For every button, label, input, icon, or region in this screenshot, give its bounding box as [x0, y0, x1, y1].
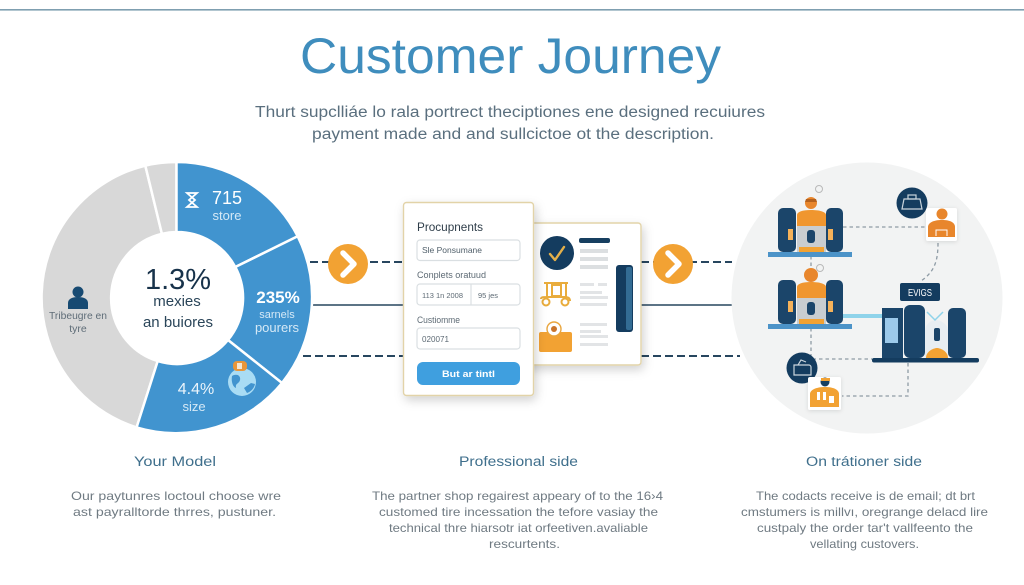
body text: right: The codacts receive is de email; dt brt	[756, 489, 976, 503]
centre label: 1.3%	[145, 264, 211, 296]
label: grey segment: tyre	[69, 323, 87, 335]
panel: technician network	[732, 162, 1002, 434]
label: EVIGS: EVIGS	[908, 287, 932, 299]
donut segment: grey small	[145, 162, 176, 234]
field: date: 113 1n 2008	[422, 291, 463, 300]
label: size: 4.4%	[178, 381, 214, 398]
field: date	[417, 284, 520, 305]
subtitle: payment made and and sullcictoe ot the description.	[312, 126, 714, 143]
field: name	[417, 240, 520, 260]
person: bottom	[808, 377, 841, 410]
panel: back card	[500, 223, 641, 365]
label: grey segment: Tribeugre en	[49, 310, 107, 322]
arrow: right chevron	[653, 244, 693, 284]
column: professional side	[372, 454, 663, 551]
field: number: 020071	[422, 335, 450, 344]
machine: top	[768, 186, 852, 257]
body text: centre: technical thre hiarsotr iat orfeetiven.avaliable	[389, 521, 648, 535]
dashed links	[811, 227, 938, 396]
body text: right: vellating custovers.	[810, 537, 919, 551]
icon: wallet	[539, 322, 572, 352]
label: size: size	[182, 399, 206, 414]
body text: left: Our paytunres loctoul choose wre	[71, 489, 281, 503]
label: pourers: pourers	[255, 320, 300, 335]
machine: middle	[768, 264, 852, 329]
label: pourers	[255, 288, 300, 335]
centre label: mexies	[153, 293, 201, 310]
subtitle: Thurt supclliáe lo rala portrect theciptiones ene designed recuiures	[255, 104, 765, 121]
text lines: bottom	[580, 323, 608, 346]
arrow: left chevron	[328, 244, 368, 284]
cyan connector	[843, 314, 883, 318]
donut segment: grey large	[42, 166, 162, 427]
body text: centre: customed tire incessation the tefore vasiay the	[379, 505, 658, 519]
centre label	[143, 264, 213, 331]
donut segment: store	[176, 162, 298, 267]
icon: person	[68, 286, 88, 309]
body text: left: ast payralltorde thrres, pustuner.	[73, 505, 276, 519]
label: store: 715	[212, 188, 242, 208]
icon: store	[187, 193, 197, 207]
body text: centre: The partner shop regairest appeary of to the 16›4	[372, 489, 663, 503]
body text: centre: rescurtents.	[489, 537, 560, 551]
tall bar	[616, 265, 633, 332]
column: your model	[71, 454, 281, 519]
field: number	[417, 328, 520, 349]
button: But ar tintl	[442, 369, 495, 379]
body text: right: cmstumers is millvı, oregrange delacd lire	[741, 505, 988, 519]
form heading: Procupnents	[417, 222, 483, 234]
label: store: store	[213, 208, 241, 223]
column: your model: Your Model	[134, 454, 216, 469]
donut segment: pourers	[228, 236, 312, 383]
icon: globe	[228, 361, 256, 396]
label: grey segment	[49, 310, 107, 335]
icon: vehicle	[541, 283, 570, 306]
column: on trationer side: On trátioner side	[806, 454, 922, 469]
label: store	[212, 188, 242, 223]
field: name: Sle Ponsumane	[422, 245, 482, 255]
centre label: an buiores	[143, 314, 213, 331]
label: EVIGS	[900, 283, 940, 301]
donut segment: size	[137, 340, 282, 433]
body text: right: custpaly the order tar't vallfeento the	[757, 521, 973, 535]
label: size	[178, 381, 214, 414]
label: pourers: 235%	[256, 288, 300, 307]
connector lines	[303, 262, 740, 356]
icon: check badge	[540, 236, 574, 270]
badge: top right	[896, 188, 928, 218]
machine: large	[872, 305, 979, 362]
title: Customer Journey	[300, 28, 721, 84]
column: professional side: Professional side	[459, 454, 578, 469]
text lines: top	[579, 238, 610, 269]
body text: right	[741, 489, 988, 551]
field: date: 95 jes	[478, 291, 498, 300]
field label: complete: Conplets oratuud	[417, 270, 486, 280]
button	[417, 362, 520, 385]
label: pourers: sarnels	[259, 309, 295, 321]
person: top right	[926, 208, 957, 241]
field label: customer: Custiomme	[417, 315, 460, 325]
body text: centre	[372, 489, 663, 551]
column: on trationer side	[741, 454, 988, 551]
subtitle	[255, 104, 765, 143]
badge: bottom left	[786, 352, 818, 384]
panel: donut chart	[42, 162, 312, 433]
text lines: middle	[580, 283, 608, 306]
panel: form card	[404, 202, 534, 396]
body text: left	[71, 489, 281, 519]
